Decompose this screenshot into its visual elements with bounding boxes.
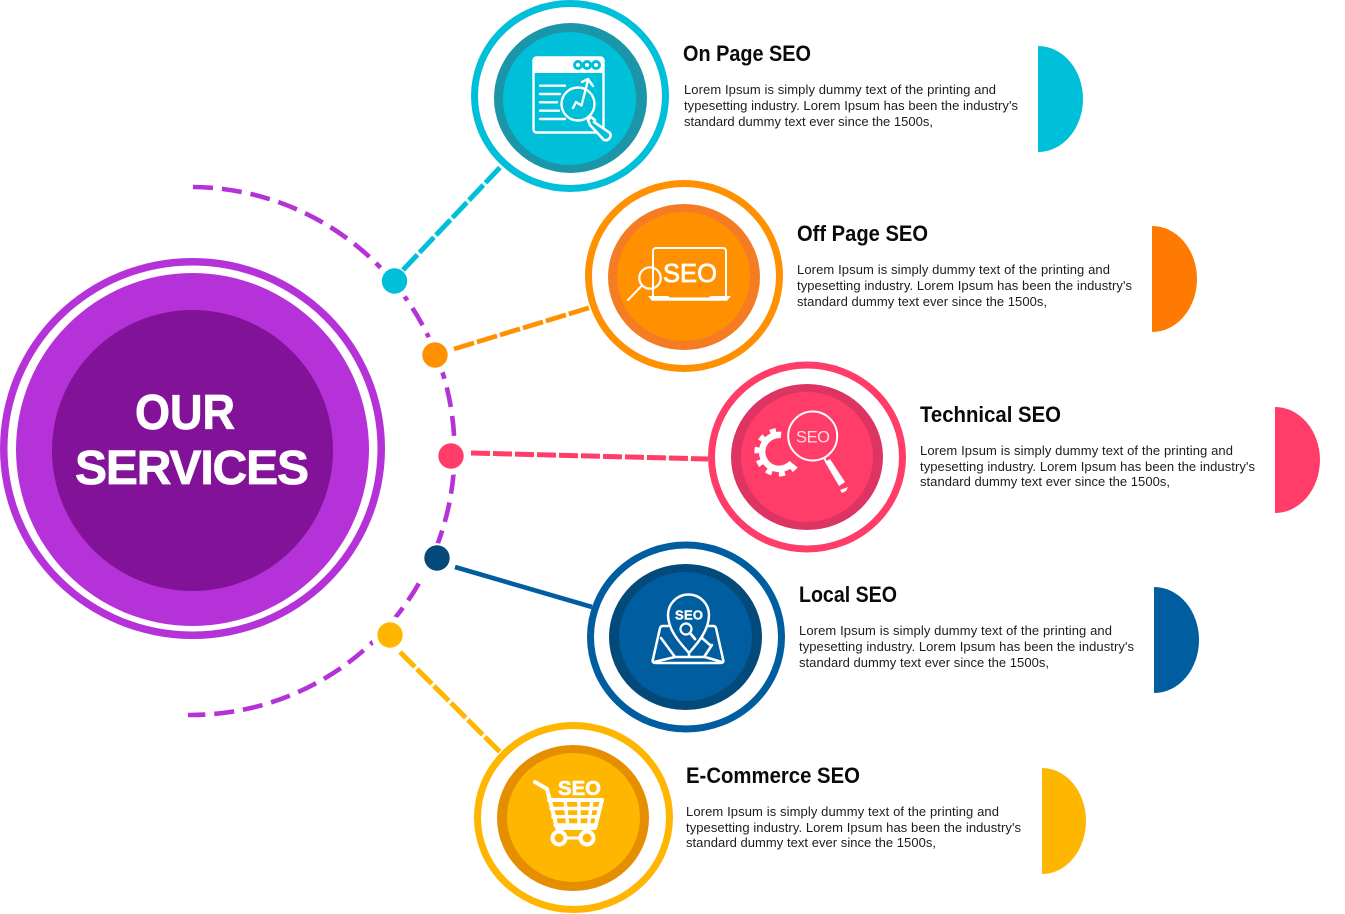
text block: typesetting industry. Lorem Ipsum has been the industry's — [684, 98, 1018, 113]
badge — [474, 4, 666, 188]
text block: Lorem Ipsum is simply dummy text of the printing and — [684, 82, 996, 97]
icon: browser chart magnifier — [533, 57, 611, 140]
half circle — [1152, 226, 1197, 332]
heading: Technical SEO — [920, 402, 1061, 427]
text block: Lorem Ipsum is simply dummy text of the printing and — [799, 623, 1112, 638]
icon: map pin — [653, 594, 723, 663]
badge — [588, 184, 780, 368]
text block: standard dummy text ever since the 1500s, — [686, 835, 936, 850]
half circle — [1154, 587, 1199, 693]
text block: typesetting industry. Lorem Ipsum has been the industry's — [799, 639, 1134, 654]
half circle — [1038, 46, 1083, 152]
text block: standard dummy text ever since the 1500s, — [797, 294, 1047, 309]
dot: local seo — [424, 545, 450, 571]
text block: typesetting industry. Lorem Ipsum has been the industry's — [686, 820, 1022, 835]
text block: Lorem Ipsum is simply dummy text of the printing and — [686, 804, 999, 819]
text block — [799, 623, 1134, 670]
heading: Local SEO — [799, 582, 897, 607]
text block: typesetting industry. Lorem Ipsum has been the industry's — [920, 459, 1256, 474]
text block — [684, 82, 1018, 129]
dot: technical seo — [438, 443, 464, 469]
icon: shopping cart: SEO — [558, 778, 601, 800]
text block: standard dummy text ever since the 1500s, — [799, 655, 1049, 670]
title: our: OUR — [135, 386, 235, 440]
badge — [712, 365, 902, 549]
connector: local seo — [455, 567, 592, 607]
text block — [686, 804, 1022, 850]
dashed arc around the hub — [188, 187, 455, 715]
dot: e-commerce seo — [377, 622, 403, 648]
connector: e-commerce seo — [400, 652, 500, 752]
half circle — [1042, 768, 1086, 874]
icon: map pin: SEO — [675, 608, 703, 622]
text block: standard dummy text ever since the 1500s, — [920, 474, 1170, 489]
panel: e-commerce seo — [478, 726, 1086, 910]
white halos around connector dots — [371, 262, 470, 654]
text block: typesetting industry. Lorem Ipsum has been the industry's — [797, 278, 1132, 293]
heading: Off Page SEO — [797, 221, 928, 246]
panel: technical seo — [712, 365, 1320, 549]
panel: our services hub — [0, 258, 385, 639]
text block: Lorem Ipsum is simply dummy text of the printing and — [797, 262, 1110, 277]
icon: gear and magnifier: SEO — [796, 429, 830, 447]
text block — [797, 262, 1132, 309]
panel: on page seo — [474, 4, 1083, 188]
badge — [478, 726, 670, 910]
heading: E-Commerce SEO — [686, 763, 860, 788]
connector: on page seo — [403, 160, 507, 270]
icon: shopping cart — [535, 778, 602, 844]
panel: off page seo — [588, 184, 1197, 368]
icon: laptop seo magnifier: SEO — [663, 258, 717, 288]
connector: technical seo — [471, 453, 708, 459]
icon: gear and magnifier — [757, 412, 848, 493]
text block — [920, 443, 1256, 489]
dot: off page seo — [422, 342, 448, 368]
heading: On Page SEO — [683, 41, 811, 66]
panel: local seo — [590, 545, 1199, 729]
title: services: SERVICES — [75, 442, 309, 495]
text block: Lorem Ipsum is simply dummy text of the printing and — [920, 443, 1233, 458]
dot: on page seo — [382, 268, 407, 294]
half circle — [1275, 407, 1320, 513]
icon: laptop seo magnifier — [628, 248, 731, 301]
text block: standard dummy text ever since the 1500s, — [684, 114, 933, 129]
connector: off page seo — [454, 306, 595, 349]
badge — [590, 545, 782, 729]
